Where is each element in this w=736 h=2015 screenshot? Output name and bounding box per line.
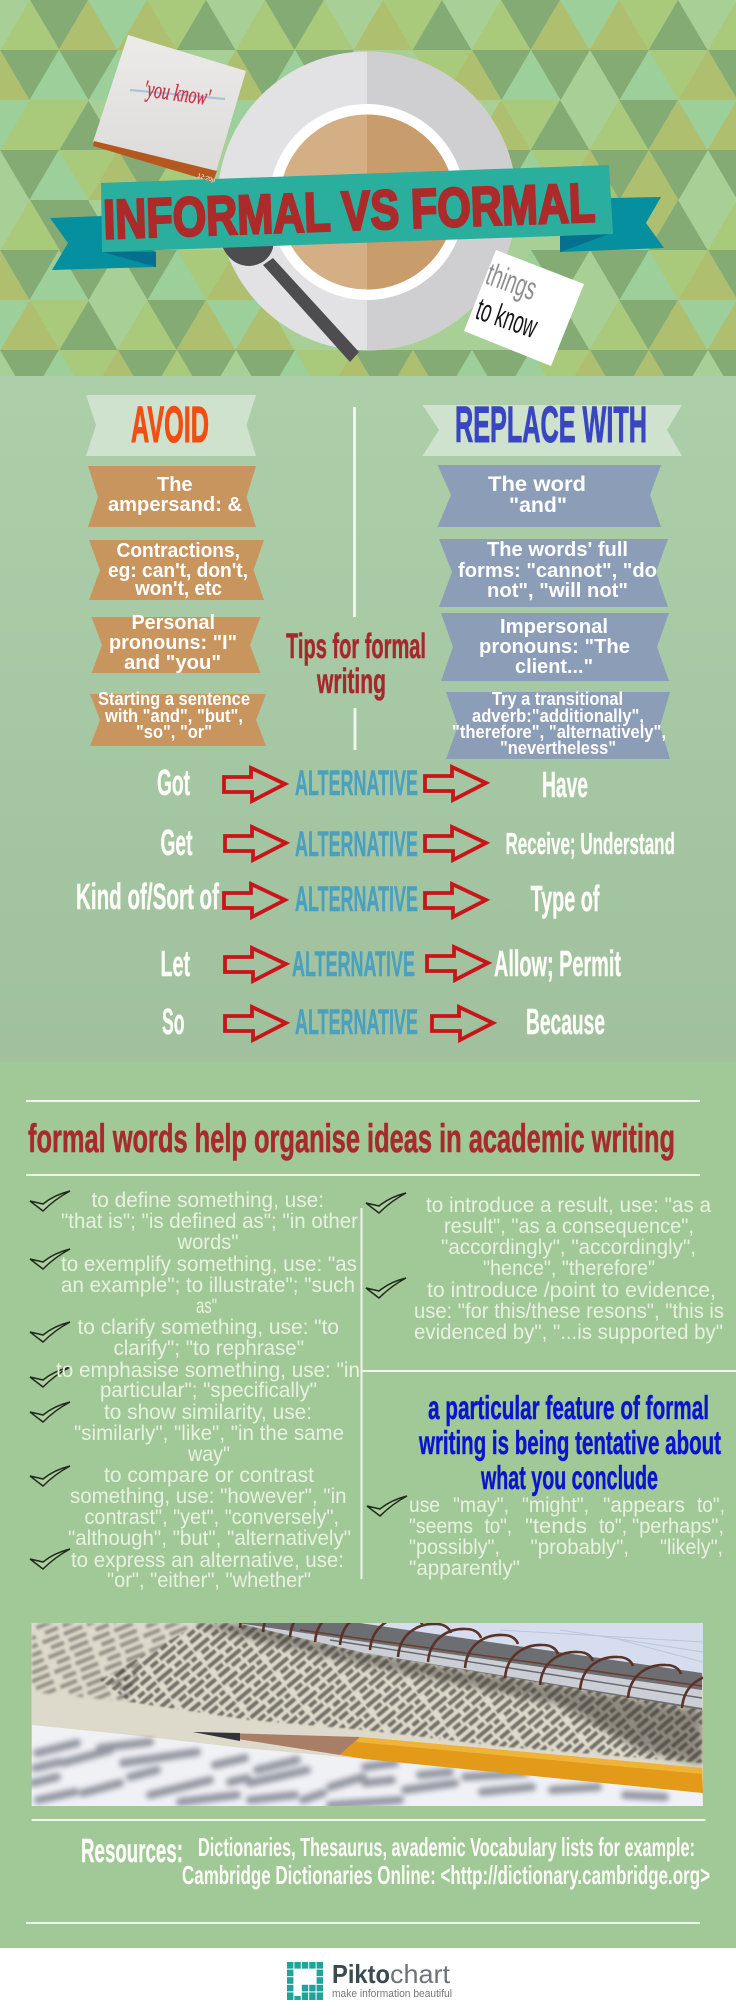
icon: spoon xyxy=(222,240,359,362)
list item: result: "accordingly", "accordingly", xyxy=(441,1236,696,1259)
heading banner: avoid: AVOID xyxy=(131,396,209,453)
panel: avoid column xyxy=(86,395,266,746)
list item: similarity: to show similarity, use: xyxy=(104,1401,312,1424)
card: things to know xyxy=(464,250,584,366)
row: kind of to type of: Type of xyxy=(530,878,600,919)
list item: compare: "although", "but", "alternatively" xyxy=(68,1527,351,1550)
avoid item: personal pronouns: and "you" xyxy=(124,652,221,674)
card: you know xyxy=(93,35,246,184)
list item: emphasise: to emphasise something, use: "in xyxy=(56,1359,360,1382)
text column: organising phrases xyxy=(30,1189,360,1592)
list item: similarity: way" xyxy=(187,1443,230,1466)
list item: exemplify: an example"; to illustrate"; "such xyxy=(61,1274,355,1297)
list item: alternative: "or", "either", "whether" xyxy=(107,1569,311,1592)
list item: tentative words: to", xyxy=(697,1494,725,1517)
avoid item: personal pronouns: pronouns: "I" xyxy=(109,632,237,654)
list item: tentative words: "perhaps", xyxy=(632,1515,724,1538)
replace item: the word and: The word xyxy=(488,473,586,496)
list item: tentative words: "possibly", xyxy=(409,1536,500,1559)
list item: compare: something, use: "however", "in xyxy=(70,1485,346,1508)
panel: tips section background xyxy=(0,376,736,1062)
blurred text on lower page xyxy=(33,1742,665,1805)
resources text: Resources: xyxy=(81,1832,183,1869)
card: things to know: things xyxy=(482,256,542,307)
list item: alternative xyxy=(30,1549,344,1592)
footer: white strip xyxy=(0,1948,736,2015)
replace item: impersonal pronouns: client..." xyxy=(515,656,593,678)
avoid item: starting a sentence: "so", "or" xyxy=(136,722,212,742)
triangle pattern background xyxy=(0,0,736,400)
avoid item: contractions: won't, etc xyxy=(134,578,222,600)
replace item: transitional adverb: "therefore", "alternatively", xyxy=(452,722,666,742)
list item: define: to define something, use: xyxy=(92,1189,324,1212)
replace item: transitional adverb: adverb:"additionally", xyxy=(472,706,644,726)
list item: tentative words: "appears xyxy=(603,1494,685,1517)
card: you know: 'you know' xyxy=(142,76,213,111)
row: kind of to type of: Kind of/Sort of xyxy=(76,876,220,917)
list item: tentative words: "probably", xyxy=(530,1536,629,1559)
caption: tips for formal writing: writing xyxy=(316,662,386,701)
list item: tentative words: to", xyxy=(484,1515,512,1538)
row: got to have: Have xyxy=(542,764,588,805)
list item: clarify: to clarify something, use: "to xyxy=(78,1316,339,1339)
list item: emphasise xyxy=(30,1359,360,1402)
row: got to have xyxy=(157,762,588,805)
avoid item: contractions: eg: can't, don't, xyxy=(108,560,248,582)
list item: compare: to compare or contrast xyxy=(104,1464,314,1487)
avoid item: starting a sentence: Starting a sentence xyxy=(98,689,250,709)
list item: result: to introduce a result, use: "as a xyxy=(426,1194,711,1217)
avoid item: ampersand: ampersand: & xyxy=(108,494,242,516)
row: kind of to type of xyxy=(76,876,600,919)
avoid item: personal pronouns xyxy=(92,612,260,674)
photo: dictionary, notebook and pencil xyxy=(32,1623,703,1806)
logo wordmark: Pikto xyxy=(332,1959,390,1989)
logo wordmark xyxy=(332,1959,451,1989)
row: got to have: ALTERNATIVE xyxy=(295,764,418,803)
center divider and caption xyxy=(286,407,426,750)
replace item: impersonal pronouns: pronouns: "The xyxy=(479,636,630,658)
avoid item: starting a sentence: with "and", "but", xyxy=(104,706,243,726)
list item: define xyxy=(30,1189,358,1254)
list item: result: "hence", "therefore" xyxy=(483,1257,655,1280)
list item: similarity xyxy=(30,1401,344,1466)
row: get to receive: ALTERNATIVE xyxy=(295,825,418,864)
logo tagline: make information beautiful xyxy=(332,1988,452,2000)
list item: tentative words: "seems xyxy=(409,1515,473,1538)
heading banner: replace with xyxy=(422,396,682,456)
row: kind of to type of: ALTERNATIVE xyxy=(295,880,418,919)
logo wordmark: chart xyxy=(390,1959,451,1989)
list item: compare: contrast", "yet", "conversely", xyxy=(84,1506,339,1529)
row: got to have: Got xyxy=(157,762,190,803)
row: so to because: So xyxy=(162,1001,184,1042)
ribbon banner with title xyxy=(50,165,664,270)
avoid item: starting a sentence xyxy=(90,689,266,746)
list item: define: words" xyxy=(177,1231,238,1254)
row: let to allow: Allow; Permit xyxy=(494,943,621,984)
list item: compare xyxy=(30,1464,351,1550)
row: so to because xyxy=(162,1001,605,1042)
list item: tentative words: "apparently" xyxy=(409,1557,520,1580)
replace item: full forms: The words' full xyxy=(487,539,628,561)
list item: tentative words: "may", xyxy=(453,1494,509,1517)
avoid item: personal pronouns: Personal xyxy=(132,612,215,634)
replace item: full forms: forms: "cannot", "do xyxy=(458,560,657,582)
icon: piktochart mark xyxy=(287,1962,323,2000)
title: INFORMAL VS FORMAL xyxy=(102,171,596,250)
panel: replace with column xyxy=(422,396,682,759)
list item: exemplify xyxy=(30,1249,357,1318)
avoid item: contractions: Contractions, xyxy=(116,540,240,562)
list item: define: "that is"; "is defined as"; "in other xyxy=(61,1210,358,1233)
row: so to because: ALTERNATIVE xyxy=(295,1003,418,1042)
caption: tips for formal writing xyxy=(286,627,426,701)
row: get to receive xyxy=(160,822,675,864)
list item: tentative words: "might", xyxy=(522,1494,589,1517)
text column: results and evidence xyxy=(366,1193,724,1344)
card: things to know: to know xyxy=(472,291,543,345)
replace item: the word and: "and" xyxy=(509,494,567,517)
list item: tentative words xyxy=(367,1494,725,1580)
replace item: full forms: not", "will not" xyxy=(487,580,628,602)
list item: emphasise: particular"; "specifically" xyxy=(100,1379,317,1402)
row: let to allow xyxy=(160,943,621,984)
panel: word alternatives xyxy=(76,762,675,1042)
list item: exemplify: as" xyxy=(196,1295,217,1318)
list item: clarify: clarify"; "to rephrase" xyxy=(114,1337,304,1360)
replace item: transitional adverb: Try a transitional xyxy=(492,689,623,709)
replace item: the word and xyxy=(438,465,661,527)
panel: academic writing section background xyxy=(0,1062,736,1948)
caption: tips for formal writing: Tips for formal xyxy=(286,627,426,666)
list item: tentative words: to", xyxy=(599,1515,627,1538)
card: you know: 12:20p xyxy=(196,173,216,184)
row: let to allow: Let xyxy=(160,943,190,984)
list item: tentative words: use xyxy=(409,1494,440,1517)
replace item: impersonal pronouns: Impersonal xyxy=(500,616,608,638)
replace item: transitional adverb xyxy=(446,689,670,759)
list item: clarify xyxy=(30,1316,339,1360)
row: get to receive: Get xyxy=(160,822,193,863)
list item: tentative words: "tends xyxy=(525,1515,587,1538)
row: let to allow: ALTERNATIVE xyxy=(292,945,415,984)
list item: evidence: use: "for this/these resons", "this is xyxy=(414,1300,724,1323)
replace item: impersonal pronouns xyxy=(441,613,669,681)
list item: evidence: to introduce /point to evidence, xyxy=(427,1279,716,1302)
panel: header with triangle pattern xyxy=(0,0,736,400)
replace item: full forms xyxy=(439,539,668,607)
replace item: transitional adverb: "nevertheless" xyxy=(500,738,616,758)
heading: tentative conclusions xyxy=(418,1389,721,1496)
list item: similarity: "similarly", "like", "in the same xyxy=(74,1422,344,1445)
avoid item: ampersand xyxy=(88,466,256,527)
list item: exemplify: to exemplify something, use: "as xyxy=(61,1253,357,1276)
logo: piktochart xyxy=(287,1959,452,2000)
avoid item: contractions xyxy=(89,540,264,600)
list item: alternative: to express an alternative, use: xyxy=(71,1549,344,1572)
avoid item: ampersand: The xyxy=(157,474,192,496)
list item: result xyxy=(366,1193,711,1280)
resources text xyxy=(81,1832,710,1890)
icon: plate and cup xyxy=(218,52,516,350)
heading banner: avoid xyxy=(86,395,256,456)
row: so to because: Because xyxy=(526,1001,605,1042)
list item: tentative words: "likely", xyxy=(660,1536,723,1559)
list item: evidence: evidenced by", "...is supported by" xyxy=(414,1321,723,1344)
list item: result: result", "as a consequence", xyxy=(444,1215,694,1238)
list item: evidence xyxy=(366,1278,724,1344)
